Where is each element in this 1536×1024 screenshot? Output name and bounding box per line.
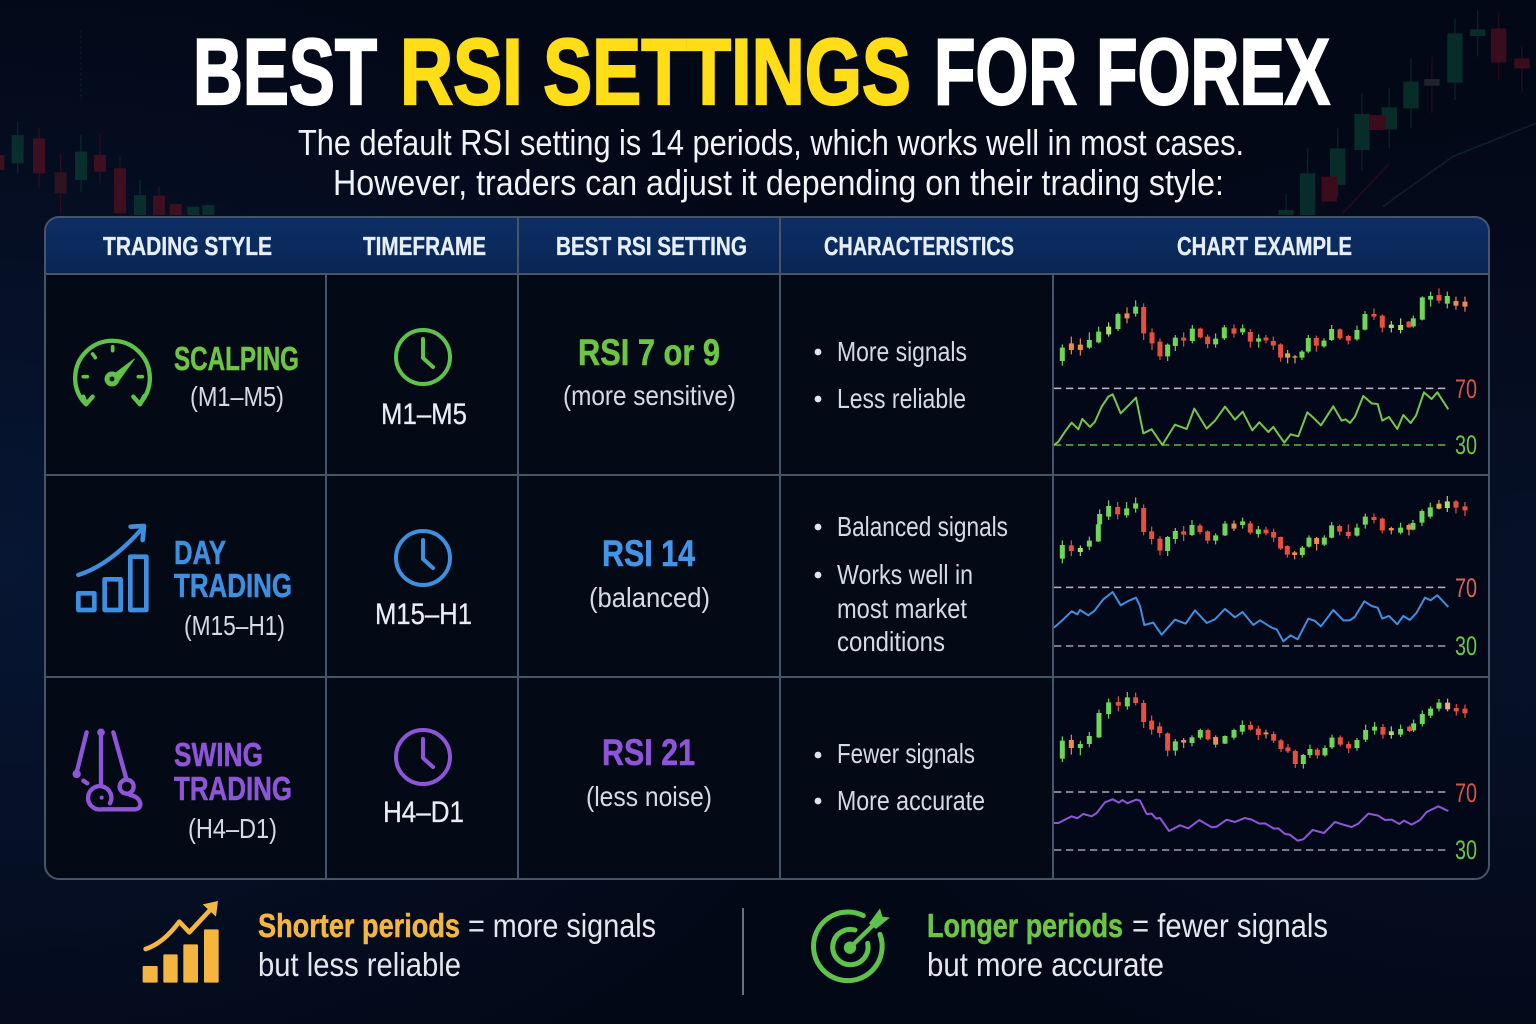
- title: RSI SETTINGS: [400, 19, 911, 124]
- RSI 7 or 9: [563, 332, 736, 411]
- scalping label: [174, 340, 299, 412]
- day trading label: TRADING: [174, 567, 292, 604]
- subtitle: However, traders can adjust it depending on their trading style:: [333, 162, 1224, 203]
- RSI line: [1054, 792, 1448, 850]
- callout: shorter periods: = more signals: [468, 907, 656, 944]
- RSI line: [1054, 388, 1448, 445]
- characteristics scalping: Less reliable: [837, 383, 966, 414]
- callout: shorter periods: but less reliable: [258, 946, 461, 983]
- scalping label: SCALPING: [174, 340, 299, 377]
- RSI 7 or 9: (more sensitive): [563, 380, 736, 411]
- swing trading label: TRADING: [174, 770, 292, 807]
- characteristics day trading: [815, 511, 1008, 657]
- icon: rising bars: [143, 901, 219, 983]
- RSI 14: RSI 14: [602, 533, 695, 574]
- subtitle: The default RSI setting is 14 periods, which works well in most cases.: [298, 122, 1244, 163]
- RSI 14: [589, 533, 710, 613]
- timeframe H4-D1: H4–D1: [383, 796, 464, 829]
- timeframe M15-H1: M15–H1: [375, 598, 472, 631]
- characteristics swing trading: More accurate: [837, 785, 985, 816]
- callout: shorter periods: [258, 907, 656, 983]
- swing trading label: (H4–D1): [188, 813, 277, 844]
- day trading label: [174, 534, 292, 641]
- title: [193, 19, 1330, 124]
- chart: scalping: 70: [1455, 374, 1477, 404]
- characteristics day trading: Works well in: [837, 559, 973, 590]
- swing trading label: SWING: [174, 736, 263, 773]
- icon: gauge: [75, 341, 150, 404]
- characteristics scalping: [815, 336, 967, 414]
- RSI 14: (balanced): [589, 582, 710, 613]
- RSI 7 or 9: RSI 7 or 9: [578, 332, 720, 373]
- chart: day trading: 30: [1455, 631, 1477, 661]
- chart: day trading: [1054, 496, 1477, 661]
- characteristics day trading: most market: [837, 593, 967, 624]
- candlesticks: [1062, 496, 1465, 563]
- swing trading label: [174, 736, 292, 844]
- callout: longer periods: [927, 907, 1328, 983]
- characteristics scalping: More signals: [837, 336, 967, 367]
- chart: swing trading: [1054, 692, 1477, 865]
- title: BEST: [193, 19, 377, 124]
- chart: day trading: 70: [1455, 573, 1477, 603]
- icon: clock blue: [396, 531, 450, 585]
- characteristics swing trading: Fewer signals: [837, 738, 975, 769]
- subtitle: [298, 122, 1244, 203]
- icon: clock purple: [396, 730, 450, 784]
- table header: BEST RSI SETTING: [556, 231, 747, 261]
- callout: longer periods: but more accurate: [927, 946, 1164, 983]
- table header: [103, 231, 1352, 261]
- background candles: right: [1286, 10, 1536, 215]
- icon: growth bars: [78, 526, 146, 610]
- RSI 21: [586, 732, 712, 812]
- callout: longer periods: = fewer signals: [1132, 907, 1328, 944]
- scalping label: (M1–M5): [190, 381, 284, 412]
- chart: swing trading: 70: [1455, 778, 1477, 808]
- characteristics day trading: Balanced signals: [837, 511, 1008, 542]
- callout: longer periods: Longer periods: [927, 907, 1123, 944]
- table header: CHARACTERISTICS: [824, 231, 1014, 261]
- RSI 21: (less noise): [586, 781, 712, 812]
- icon: pendulum: [74, 730, 140, 809]
- chart: scalping: 30: [1455, 430, 1477, 460]
- chart: scalping: [1054, 288, 1477, 460]
- timeframe M1-M5: M1–M5: [381, 398, 467, 431]
- chart: swing trading: 30: [1455, 835, 1477, 865]
- title: FOR FOREX: [934, 19, 1330, 124]
- icon: clock green: [396, 330, 450, 384]
- RSI line: [1054, 587, 1448, 646]
- day trading label: DAY: [174, 534, 226, 571]
- callout: shorter periods: Shorter periods: [258, 907, 460, 944]
- characteristics day trading: conditions: [837, 626, 945, 657]
- candlesticks: [1062, 288, 1465, 366]
- table header: TIMEFRAME: [363, 231, 486, 261]
- table header: TRADING STYLE: [103, 231, 272, 261]
- RSI 21: RSI 21: [602, 732, 695, 773]
- characteristics swing trading: [815, 738, 985, 816]
- candlesticks: [1062, 692, 1465, 769]
- background candles: left: [0, 0, 208, 215]
- icon: target: [813, 908, 890, 981]
- table header: CHART EXAMPLE: [1177, 231, 1352, 261]
- day trading label: (M15–H1): [184, 610, 285, 641]
- table: [45, 217, 1489, 880]
